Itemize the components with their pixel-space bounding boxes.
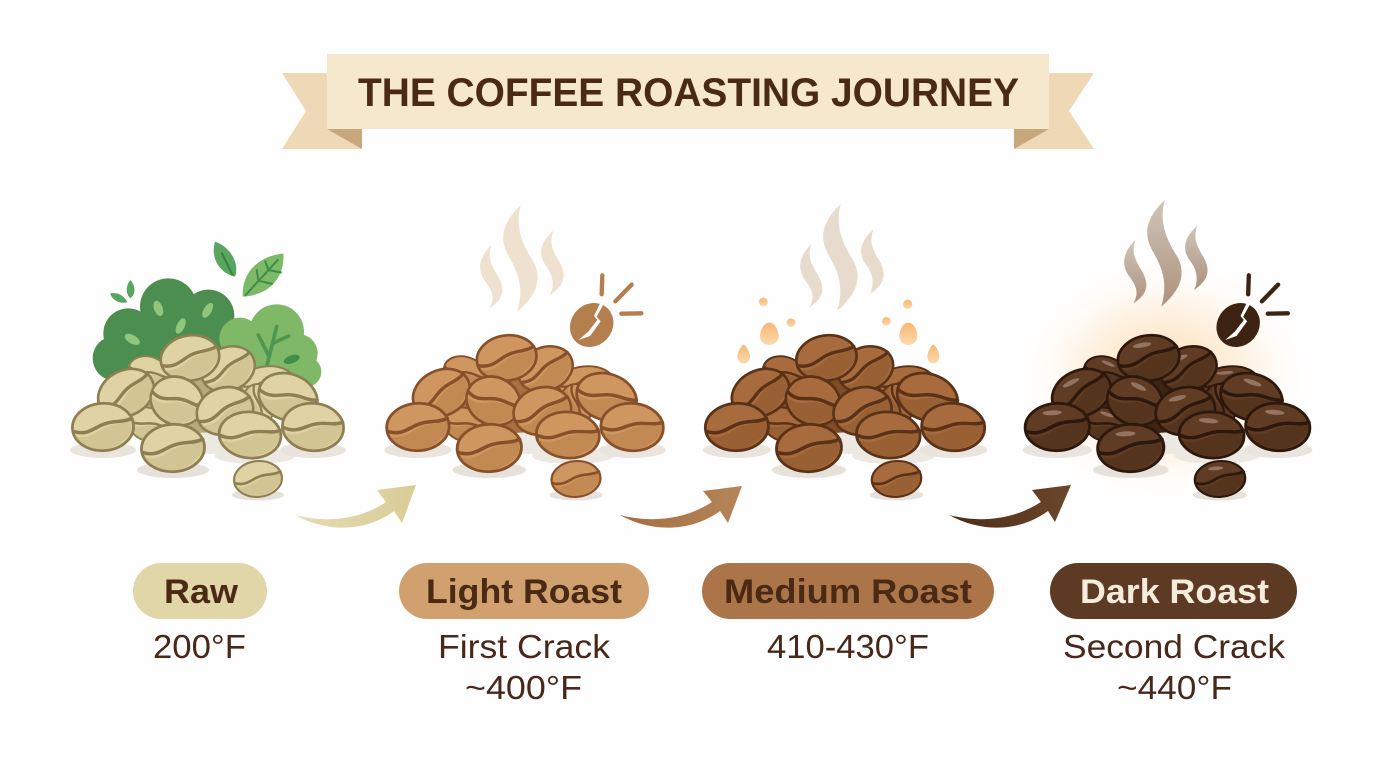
floating leaves: [214, 242, 236, 277]
label: Medium Roast: Medium Roast: [724, 573, 972, 611]
title: THE COFFEE ROASTING JOURNEY: [358, 71, 1019, 115]
temperature: first crack: ~400°F: [465, 669, 582, 706]
ribbon tail left: [282, 73, 362, 149]
bean pile: [384, 331, 666, 500]
icon: green coffee plant: [93, 242, 321, 387]
arrow: raw to light: [295, 485, 416, 528]
ribbon tail right: [1014, 73, 1094, 149]
bean pile: [703, 331, 987, 500]
temperature: 410-430F: 410-430°F: [767, 628, 929, 665]
label: Raw: Raw: [164, 573, 239, 611]
temperature: 200F: 200°F: [153, 628, 246, 665]
ribbon band: [327, 54, 1049, 129]
label: Light Roast: Light Roast: [426, 573, 622, 611]
icon: cracking bean: [561, 275, 641, 356]
panel: light roast: [384, 205, 666, 706]
arrow: light to medium: [620, 486, 742, 528]
steam: [480, 205, 564, 312]
icon: cracking bean: [1207, 275, 1288, 356]
bean pile: [70, 331, 346, 500]
dark bush: [93, 278, 234, 381]
label: Raw: [133, 563, 267, 619]
title banner: [282, 54, 1094, 149]
bush leaves: [123, 299, 215, 347]
arrow: medium to dark: [949, 485, 1071, 528]
label: Light Roast: [399, 563, 649, 619]
bean pile: [1023, 331, 1312, 500]
temperature: second crack: ~440°F: [1117, 669, 1232, 706]
label: Dark Roast: Dark Roast: [1080, 573, 1269, 611]
temperature: second crack: Second Crack: [1063, 628, 1286, 665]
icon: oil droplets: [737, 298, 939, 363]
temperature: second crack: [1063, 628, 1286, 706]
label: Dark Roast: [1050, 563, 1297, 619]
label: Medium Roast: [702, 563, 994, 619]
light bush: [219, 304, 321, 387]
temperature: first crack: First Crack: [438, 628, 611, 665]
steam: [800, 204, 884, 311]
temperature: first crack: [438, 628, 611, 706]
panel: dark roast: [1015, 200, 1315, 706]
steam: [1124, 200, 1208, 307]
heat glow: [1015, 255, 1315, 505]
panel: raw beans: [70, 242, 346, 665]
twig: [258, 327, 289, 367]
panel: medium roast: [702, 204, 994, 665]
ribbon folds: [327, 129, 1049, 149]
